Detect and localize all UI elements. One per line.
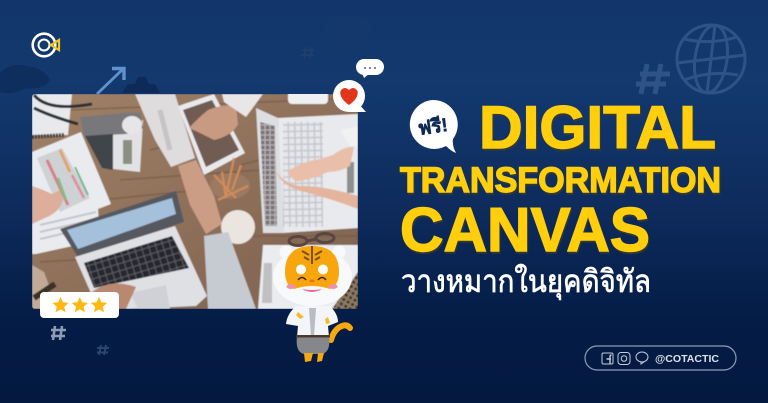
mouth	[302, 289, 322, 292]
handshake arm	[178, 160, 222, 234]
stripes	[302, 246, 322, 264]
feet	[304, 353, 324, 362]
logo	[33, 34, 59, 56]
subtitle: วางหมากในยุคดิจิทัล	[401, 264, 651, 301]
hand on tablet	[189, 106, 238, 140]
hash icon	[51, 326, 66, 340]
closed eyes	[298, 278, 326, 280]
hand on left laptop	[92, 283, 136, 309]
handle text: @COTACTIC	[655, 353, 719, 365]
arrow	[97, 68, 124, 94]
belt	[296, 335, 330, 338]
hand on paper	[32, 186, 63, 224]
tablet	[178, 94, 245, 175]
shirt	[286, 306, 338, 337]
tie	[309, 308, 316, 336]
left sleeve arm	[135, 94, 195, 167]
hands	[296, 312, 330, 324]
ears	[280, 246, 292, 258]
notebook lower right	[258, 245, 358, 309]
heading: DIGITAL: DIGITAL	[479, 94, 716, 161]
lower hand on laptop	[275, 170, 358, 209]
trousers	[297, 336, 329, 354]
instagram icon	[618, 352, 630, 364]
hash icon top right	[636, 64, 670, 94]
decorative faint shapes	[0, 17, 370, 93]
left laptop	[60, 191, 207, 309]
orange face	[285, 246, 339, 289]
phone cords	[34, 95, 92, 124]
notebook spiral	[32, 135, 64, 137]
notebook top left	[32, 94, 72, 135]
desk phone	[80, 113, 143, 172]
free label: ฟรี!	[416, 114, 449, 140]
photo: business team at desk	[32, 90, 360, 309]
line icon	[636, 352, 648, 364]
tail	[331, 325, 350, 340]
heading: CANVAS: CANVAS	[400, 196, 650, 265]
chopsticks bowl	[210, 158, 250, 200]
nose	[310, 280, 314, 282]
upper hand on laptop	[287, 147, 354, 181]
facebook icon	[602, 353, 613, 364]
social handle pill	[585, 346, 736, 370]
small hash icon	[97, 345, 109, 355]
right laptop	[256, 108, 358, 233]
white mane	[273, 248, 352, 306]
coffee cup lid	[221, 210, 255, 244]
cheeks	[286, 284, 296, 289]
dots speech bubble	[356, 59, 384, 78]
goggles	[289, 234, 334, 246]
tiger mascot	[273, 234, 352, 362]
heart speech bubble	[333, 80, 366, 112]
white object top	[287, 94, 329, 105]
lower sleeve	[204, 232, 256, 309]
paper report	[32, 132, 111, 254]
wood grain	[40, 98, 360, 262]
wooden desk	[32, 94, 358, 309]
globe icon	[677, 23, 745, 95]
star rating card	[40, 292, 119, 318]
white cuff right	[342, 128, 357, 145]
heading: TRANSFORMATION: TRANSFORMATION	[400, 161, 721, 200]
upper sleeve	[222, 94, 263, 117]
eye patches	[296, 264, 306, 274]
wrist lower left	[32, 265, 55, 309]
free speech bubble	[410, 100, 458, 153]
